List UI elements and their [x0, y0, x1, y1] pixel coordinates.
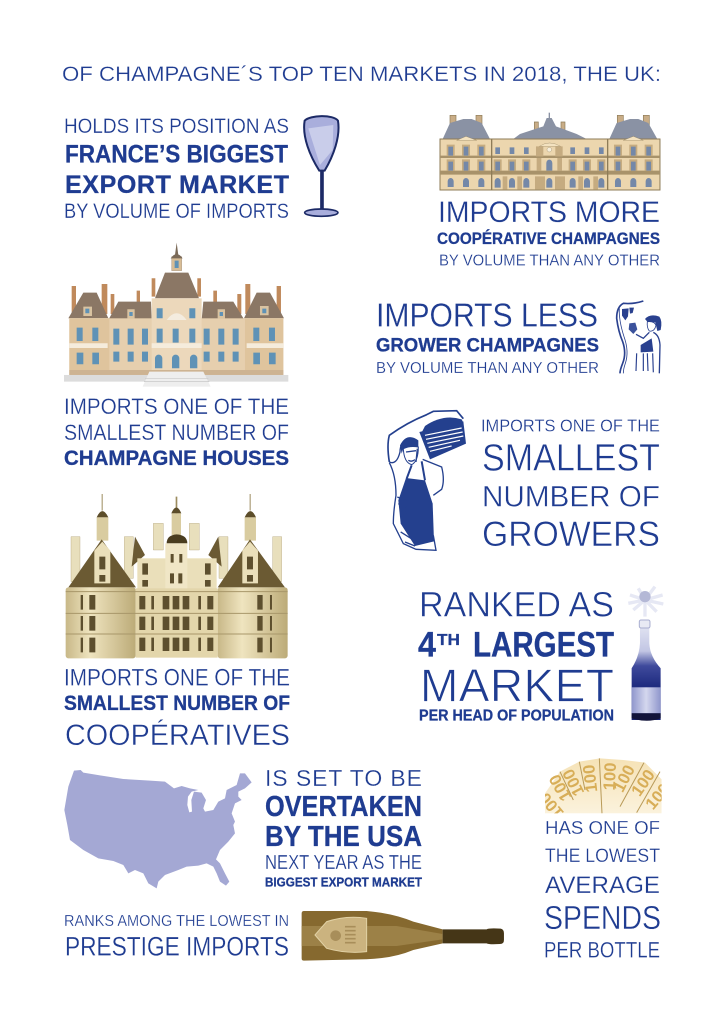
- text: smallest number of coopératives: [64, 664, 290, 752]
- text: France's biggest export market: BY VOLUME OF IMPORTS: [64, 200, 289, 223]
- icon: fan of banknotes: 100: [545, 771, 575, 804]
- text: France's biggest export market: HOLDS ITS POSITION AS: [64, 115, 289, 138]
- icon: fan of banknotes: 100: [609, 762, 639, 795]
- text: smallest number of growers: IMPORTS ONE OF THE: [481, 416, 660, 436]
- text: smallest number of growers: [481, 416, 660, 554]
- icon: fan of banknotes: [545, 758, 662, 814]
- text: set to be overtaken by the USA: NEXT YEAR AS THE: [265, 852, 422, 874]
- panel: grower champagnes: [376, 296, 661, 377]
- icon: fan of banknotes: 100: [641, 780, 674, 813]
- text: France's biggest export market: FRANCE’S BIGGEST: [65, 140, 288, 168]
- text: set to be overtaken by the USA: BIGGEST EXPORT MARKET: [265, 874, 422, 890]
- text: lowest in prestige imports: PRESTIGE IMPORTS: [65, 932, 289, 962]
- text: lowest average spends per bottle: PER BOTTLE: [544, 938, 660, 962]
- text: ranked as 4th largest market: MARKET: [420, 660, 614, 712]
- panel: champagne houses: [64, 243, 289, 470]
- text: ranked as 4th largest market: [418, 586, 614, 724]
- text: lowest average spends per bottle: THE LOWEST: [545, 846, 660, 867]
- text: set to be overtaken by the USA: OVERTAKEN: [265, 791, 422, 823]
- text: smallest number of growers: SMALLEST: [482, 438, 660, 480]
- icon: fan of banknotes: 100: [579, 764, 601, 793]
- text: smallest number of champagne houses: SMALLEST NUMBER OF: [64, 420, 289, 445]
- text: ranked as 4th largest market: TH: [437, 632, 460, 649]
- panel: coopérative champagnes: [437, 113, 660, 270]
- panel: 4th largest market: [418, 586, 663, 724]
- icon: fan of banknotes: 100: [600, 762, 620, 791]
- text: ranked as 4th largest market: LARGEST: [473, 626, 614, 664]
- text: imports less grower champagnes: [376, 296, 599, 377]
- panel: biggest export market: [64, 115, 339, 223]
- text: smallest number of champagne houses: CHAMPAGNE HOUSES: [64, 447, 289, 470]
- panel: coopératives: [64, 494, 290, 752]
- panel: overtaken by the USA: [64, 765, 422, 890]
- text: set to be overtaken by the USA: BY THE USA: [265, 821, 422, 853]
- text: ranked as 4th largest market: RANKED AS: [419, 586, 614, 624]
- text: lowest average spends per bottle: HAS ONE OF: [545, 818, 660, 838]
- text: smallest number of champagne houses: [64, 394, 289, 470]
- icon: worker carrying grape basket: [388, 411, 466, 550]
- title: OF CHAMPAGNE´S TOP TEN MARKETS IN 2018, THE UK:: [62, 63, 661, 86]
- panel: prestige imports: [64, 911, 504, 962]
- icon: champagne glass: [304, 116, 339, 216]
- icon: champagne bottle with popped cork: [628, 587, 663, 721]
- text: lowest in prestige imports: RANKS AMONG THE LOWEST IN: [64, 913, 289, 930]
- text: set to be overtaken by the USA: IS SET TO BE: [265, 765, 422, 791]
- text: imports more coopérative champagnes: COOPÉRATIVE CHAMPAGNES: [437, 229, 660, 248]
- text: lowest in prestige imports: [64, 913, 289, 962]
- icon: prestige champagne bottle: [302, 911, 504, 961]
- text: smallest number of champagne houses: IMPORTS ONE OF THE: [64, 394, 289, 419]
- icon: fan of banknotes: 100: [627, 766, 659, 800]
- icon: fan of banknotes: 100: [559, 766, 588, 799]
- text: smallest number of growers: NUMBER OF: [482, 480, 660, 514]
- text: imports less grower champagnes: IMPORTS LESS: [376, 296, 598, 334]
- text: France's biggest export market: EXPORT MARKET: [65, 171, 289, 199]
- text: imports more coopérative champagnes: BY VOLUME THAN ANY OTHER: [439, 252, 660, 270]
- text: set to be overtaken by the USA: [265, 765, 422, 890]
- text: lowest average spends per bottle: AVERAGE: [545, 872, 660, 899]
- text: lowest average spends per bottle: SPENDS: [544, 899, 661, 936]
- icon: palace with grey roofs: [440, 113, 660, 190]
- text: smallest number of coopératives: COOPÉRATIVES: [65, 719, 290, 752]
- text: imports less grower champagnes: GROWER CHAMPAGNES: [376, 336, 599, 356]
- icon: chateau with conical towers: [66, 494, 288, 658]
- map: USA silhouette: [64, 770, 252, 888]
- icon: fan of banknotes: 100: [535, 789, 568, 822]
- text: smallest number of coopératives: SMALLEST NUMBER OF: [64, 692, 290, 715]
- text: smallest number of coopératives: IMPORTS ONE OF THE: [64, 664, 290, 692]
- text: imports less grower champagnes: BY VOLUME THAN ANY OTHER: [376, 360, 599, 377]
- panel: growers: [388, 411, 660, 554]
- text: smallest number of growers: GROWERS: [482, 515, 660, 554]
- icon: champagne house chateau: [64, 243, 288, 387]
- panel: lowest average spends: [545, 758, 662, 958]
- text: ranked as 4th largest market: 4: [418, 626, 436, 664]
- text: imports more coopérative champagnes: [437, 196, 660, 270]
- text: lowest average spends per bottle: [544, 818, 661, 962]
- icon: woman harvesting grapes: [617, 301, 661, 373]
- text: ranked as 4th largest market: PER HEAD OF POPULATION: [419, 708, 614, 724]
- text: France's biggest export market: [64, 115, 289, 223]
- text: imports more coopérative champagnes: IMPORTS MORE: [438, 196, 660, 229]
